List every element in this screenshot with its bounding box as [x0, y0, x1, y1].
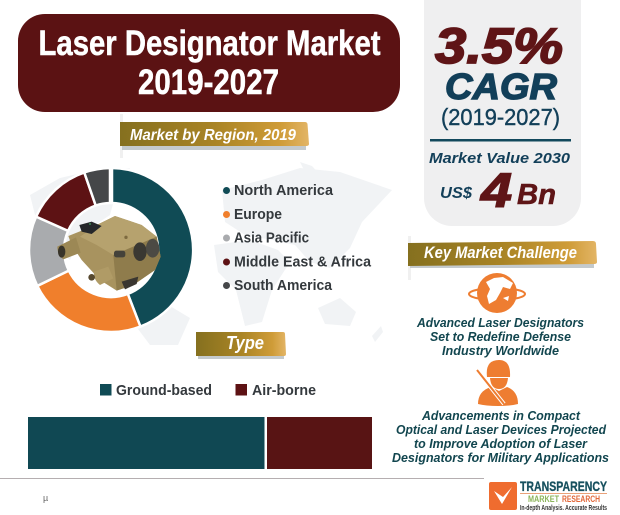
legend item: Asia Pacific: Asia Pacific	[234, 230, 309, 246]
ribbon: market by region	[120, 114, 309, 158]
type legend	[100, 382, 316, 399]
challenge text 2: Optical and Laser Devices Projected	[396, 422, 607, 437]
challenge text 1: Set to Redefine Defense	[430, 329, 571, 344]
legend item: ground-based: Ground-based	[116, 382, 212, 399]
CAGR stats panel	[424, 0, 581, 226]
legend item: air-borne: Air-borne	[252, 382, 316, 399]
market value amount: Bn	[517, 179, 556, 211]
challenge text 1: Industry Worldwide	[442, 343, 559, 358]
title banner: Laser Designator Market	[38, 24, 381, 63]
ribbon: key market challenge: Key Market Challenge	[424, 243, 577, 262]
challenge text 2	[392, 408, 609, 465]
segment: South America	[84, 168, 110, 206]
ribbon: market by region: Market by Region, 2019	[130, 127, 296, 144]
ribbon: key market challenge	[408, 236, 597, 280]
CAGR label: CAGR	[445, 66, 557, 107]
icon: soldier with rifle	[477, 360, 518, 406]
challenge text 2: Advancements in Compact	[421, 408, 581, 423]
challenge text 2: to Improve Adoption of Laser	[414, 436, 588, 451]
donut chart	[29, 168, 193, 332]
market value label: Market Value 2030	[429, 150, 571, 167]
CAGR value: 3.5%	[435, 18, 563, 74]
bar: ground-based	[28, 417, 264, 469]
market value amount	[440, 165, 556, 218]
title banner	[18, 14, 400, 112]
world map background	[30, 162, 392, 345]
market value amount: US$	[440, 185, 473, 202]
market value amount: 4	[480, 165, 512, 218]
stacked bar chart	[28, 417, 372, 469]
ribbon: type: Type	[226, 333, 264, 353]
challenge text 1: Advanced Laser Designators	[416, 315, 584, 330]
legend item: Europe: Europe	[234, 206, 282, 223]
legend item: South America: South America	[234, 277, 333, 294]
segment: Asia Pacific	[29, 217, 69, 286]
title banner: 2019-2027	[138, 63, 279, 102]
challenge text 2: Designators for Military Applications	[392, 450, 609, 465]
segment: North America	[112, 168, 193, 327]
region legend	[223, 182, 372, 294]
segment: Europe	[37, 271, 140, 332]
CAGR period: (2019-2027)	[441, 104, 560, 130]
legend item: Middle East and Africa: Middle East & Africa	[234, 254, 372, 270]
logo: Transparency Market Research	[489, 478, 607, 512]
segment: Middle East and Africa	[36, 172, 96, 231]
icon: globe	[469, 273, 525, 313]
ribbon: type	[196, 332, 286, 359]
laser designator device photo	[57, 216, 161, 291]
legend item: North America: North America	[234, 182, 334, 199]
bar: air-borne	[267, 417, 372, 469]
logo: Transparency Market Research: MARKET	[528, 494, 559, 504]
footnote mark: µ	[43, 493, 48, 503]
logo: Transparency Market Research: RESEARCH	[562, 494, 600, 504]
challenge text 1	[416, 315, 584, 358]
